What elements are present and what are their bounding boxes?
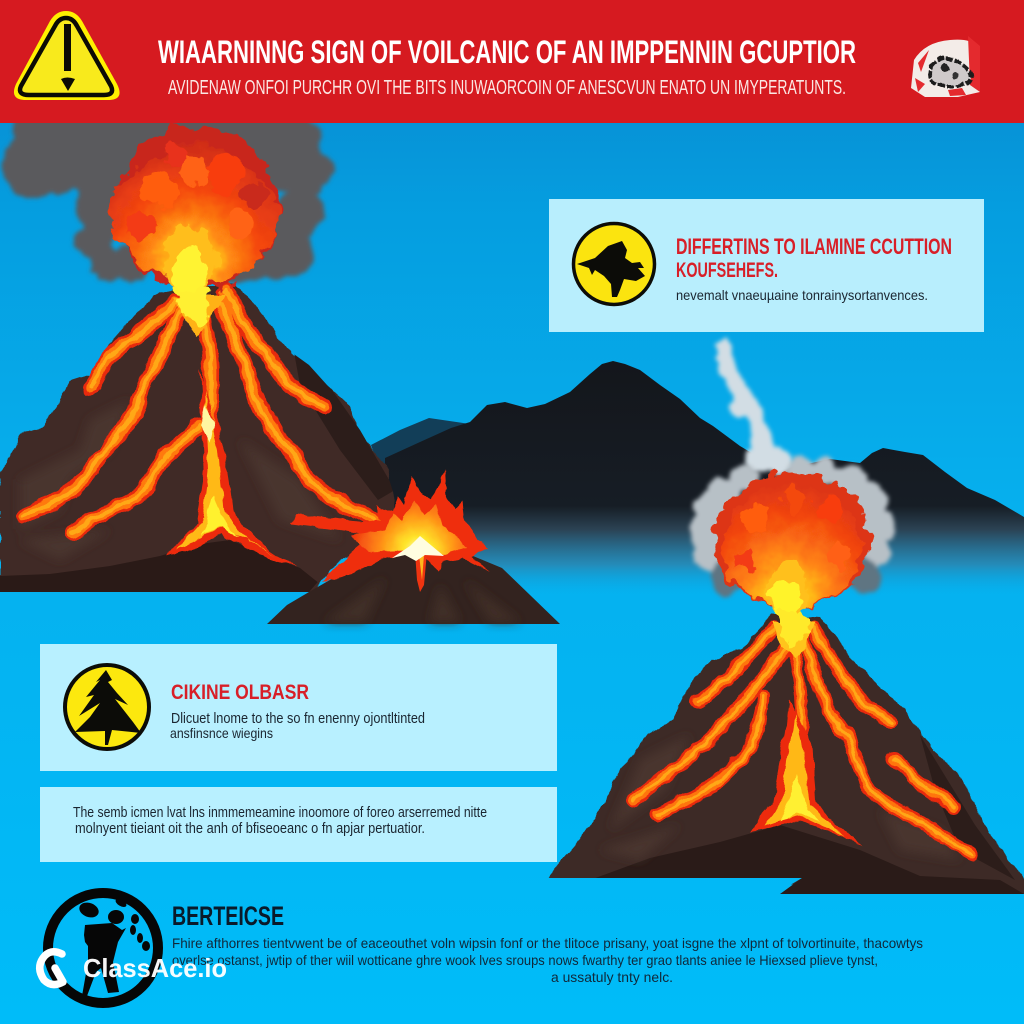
body line two: molnyent tieiant oit the anh of bfiseoeanc o fn apjar pertuatior. — [75, 820, 425, 837]
rock shading — [0, 330, 395, 592]
panel: top callout — [549, 199, 984, 332]
icon: yellow circle with pine tree — [65, 665, 149, 749]
bottom section — [48, 893, 923, 1003]
fire mottling — [733, 488, 852, 572]
cone ridges — [325, 578, 520, 622]
fire mottling — [126, 143, 267, 240]
body text: nevemalt vnaeuµaine tonrainysortanvences. — [676, 287, 928, 303]
heading: BERTEICSE — [172, 901, 284, 931]
icon: yellow circle with animal silhouette — [574, 224, 654, 304]
body line three: a ussatuly tnty nelc. — [551, 969, 673, 985]
left volcano — [0, 97, 400, 600]
mountain body — [540, 614, 1024, 900]
panel: middle callout — [40, 644, 557, 771]
body line one: The semb icmen lvat lns inmmemeamine inoomore of foreo arserremed nitte — [73, 804, 487, 821]
crater glow — [392, 536, 444, 561]
body line two: overlse ostanst, jwtip of ther wiil wotticane ghre wook lves sroups nows fwarthy ter grao tlants aniee le Hiexsed plieve tynst, — [172, 952, 878, 968]
right volcano — [540, 340, 1024, 900]
icon: emblem seal — [911, 36, 980, 97]
lava streams — [632, 622, 973, 855]
icon: warning triangle — [14, 11, 120, 100]
flames — [290, 470, 490, 582]
lava drip — [415, 552, 427, 592]
heading line two: KOUFSEHEFS. — [676, 259, 778, 282]
heading: CIKINE OLBASR — [171, 681, 309, 704]
fireball — [108, 126, 280, 325]
rock shading — [590, 735, 1024, 894]
mountain body — [0, 285, 400, 600]
steam ring — [688, 456, 893, 595]
body line two: ansfinsnce wiegins — [170, 725, 273, 741]
icon: hiker circle — [48, 893, 158, 1003]
back mountain range — [371, 361, 1024, 595]
cone — [267, 552, 560, 624]
body line one: Dlicuet lnome to the so fn enenny ojontltinted — [171, 710, 425, 727]
fireball — [714, 472, 870, 645]
watermark — [40, 952, 227, 985]
smoke cloud — [2, 97, 332, 283]
watermark text: ClassAce.io — [83, 953, 227, 983]
body line one: Fhire afthorres tientvwent be of eaceouthet voln wipsin fonf or the tlitoce prisany, yoat isgne the xlpnt of tolvortinuite, thacowtys — [172, 935, 923, 951]
icon: logo mark — [40, 952, 63, 985]
lava streams — [24, 292, 378, 568]
header banner — [0, 0, 1024, 123]
small front volcano — [267, 470, 560, 624]
panel: lower callout — [40, 787, 557, 862]
steam plume — [712, 340, 794, 476]
